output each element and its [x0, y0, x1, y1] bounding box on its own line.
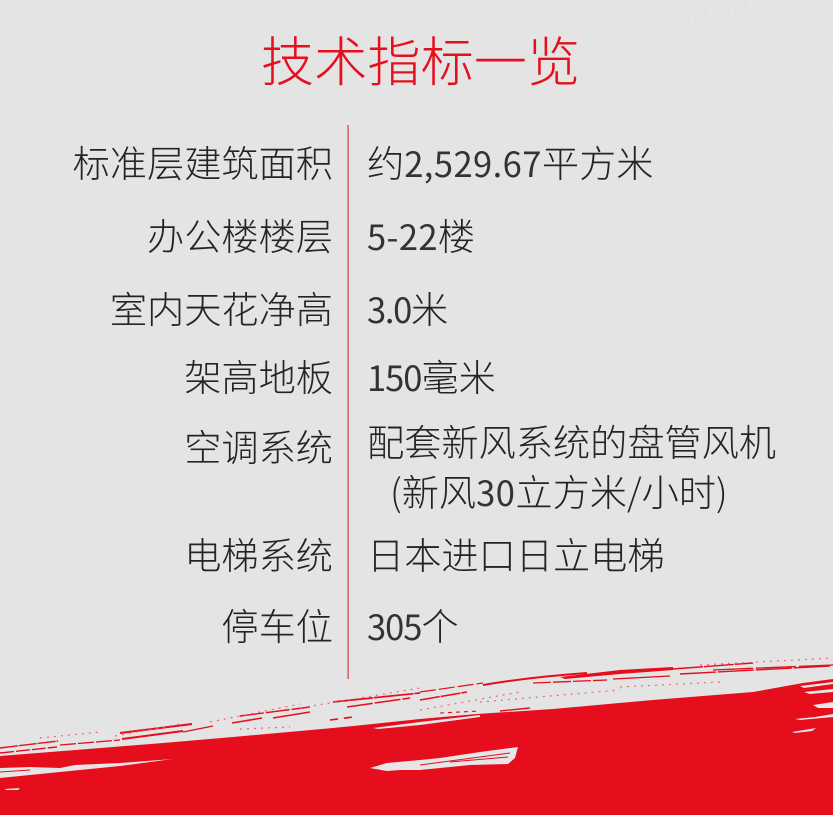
red dry-brush streaks	[0, 663, 833, 753]
label: office floors: 办公楼楼层	[147, 207, 333, 261]
value: parking: 305个	[367, 597, 459, 651]
label: parking: 停车位	[221, 597, 333, 651]
main red brush area	[0, 679, 833, 815]
label: raised floor: 架高地板	[184, 348, 333, 402]
label: air conditioning: 空调系统	[184, 418, 333, 472]
label: elevators: 电梯系统	[184, 526, 333, 580]
value: air conditioning: 配套新风系统的盘管风机	[367, 413, 776, 467]
speckles	[40, 658, 833, 738]
title: 技术指标一览	[261, 20, 580, 97]
value: elevators: 日本进口日立电梯	[367, 526, 665, 580]
vertical divider	[348, 125, 349, 679]
value: air conditioning: (新风30立方米/小时)	[390, 463, 728, 517]
value: air conditioning	[367, 413, 776, 517]
value: ceiling height: 3.0米	[367, 280, 448, 334]
value: office floors: 5-22楼	[367, 207, 475, 261]
value: raised floor: 150毫米	[367, 348, 496, 402]
label: floor area: 标准层建筑面积	[73, 134, 333, 188]
value: floor area: 约2,529.67平方米	[367, 134, 653, 188]
white dry-brush streaks inside the red	[0, 682, 833, 790]
label: ceiling height: 室内天花净高	[110, 280, 333, 334]
